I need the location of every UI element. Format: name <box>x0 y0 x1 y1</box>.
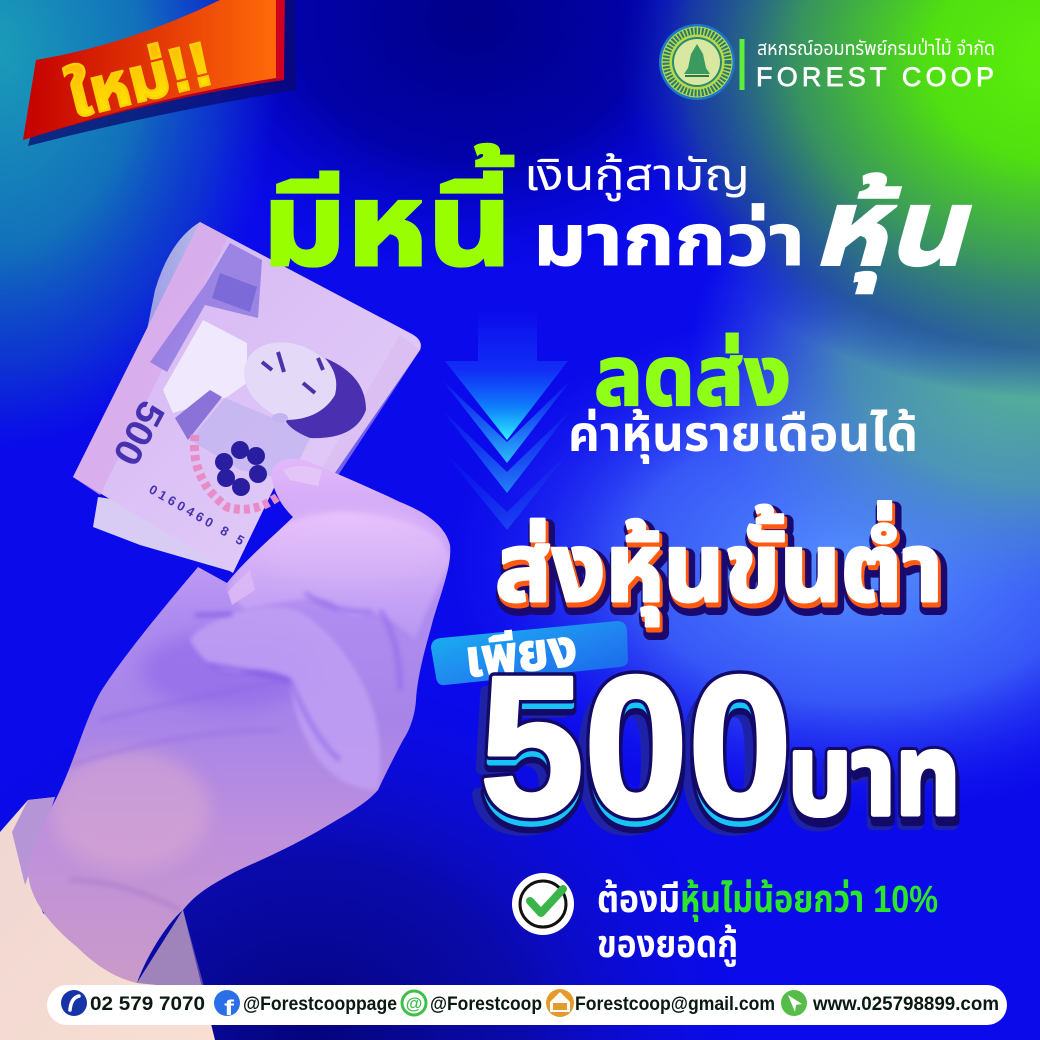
heading: debt more than shares: มีหนี้ <box>262 144 513 290</box>
badge: new ribbon <box>23 0 296 146</box>
icon: facebook <box>214 990 240 1020</box>
contact bar <box>47 985 1007 1025</box>
icon: check mark <box>512 873 574 935</box>
icon: downward arrows <box>442 310 571 530</box>
flower emblem <box>215 441 267 496</box>
amount: 500 baht <box>472 635 962 870</box>
unit baht: บาท <box>790 720 962 845</box>
number 500: 500 <box>480 643 792 864</box>
badge: only: เพียง <box>462 620 580 689</box>
banknote: 0160460 8 5 <box>146 482 250 550</box>
number 500: 500 <box>480 635 792 856</box>
contact bar: Forestcoop@gmail.com <box>575 994 775 1015</box>
contact bar: @Forestcooppage <box>243 994 397 1015</box>
text: minimum share payment: ส่งหุ้นขั้นต่ำ <box>499 508 947 633</box>
illustration: banknote held in hand <box>0 222 452 1040</box>
portrait <box>231 327 366 438</box>
icon: phone <box>61 990 87 1016</box>
icon: cooperative seal <box>659 24 735 100</box>
badge: new ribbon: ใหม่!! <box>61 29 219 132</box>
note: share requirement: ของยอดกู้ <box>597 924 738 967</box>
icon: line at: @ <box>406 994 422 1013</box>
number 500: 500 <box>472 649 784 870</box>
text: reduce monthly share payment: ลดส่ง <box>594 329 791 423</box>
text: minimum share payment: ส่งหุ้นขั้นต่ำ <box>497 505 945 630</box>
contact bar: 02 579 7070 <box>90 994 205 1015</box>
badge: only <box>431 620 628 689</box>
text: reduce monthly share payment <box>568 329 918 464</box>
banknote <box>73 222 421 573</box>
heading: debt more than shares <box>262 144 972 294</box>
unit baht: บาท <box>788 713 960 838</box>
heading: debt more than shares: หุ้น <box>812 167 972 294</box>
unit baht: บาท <box>786 723 960 848</box>
logo: Forest Coop: สหกรณ์ออมทรัพย์กรมป่าไม้ จำกัด <box>757 37 995 60</box>
hand <box>0 459 452 1040</box>
icon: facebook: f <box>224 997 235 1020</box>
unit baht: บาท <box>788 713 960 838</box>
text: reduce monthly share payment: ค่าหุ้นรายเดือนได้ <box>568 406 918 464</box>
heading: debt more than shares: มากกว่า <box>533 201 805 281</box>
note: share requirement: หุ้นไม่น้อยกว่า 10% <box>680 879 938 922</box>
logo: Forest Coop <box>659 24 995 100</box>
contact bar: www.025798899.com <box>812 994 999 1015</box>
finger: lower <box>190 607 380 790</box>
number 500: 500 <box>480 647 792 868</box>
finger: thumb <box>227 512 452 640</box>
logo: Forest Coop: FOREST COOP <box>756 62 994 92</box>
icon: website cursor <box>781 990 807 1016</box>
icon: email <box>546 989 574 1017</box>
note: share requirement <box>597 879 938 967</box>
note: share requirement: ต้องมี <box>597 879 680 921</box>
contact bar: @Forestcoop <box>430 994 542 1015</box>
text: minimum share payment: ส่งหุ้นขั้นต่ำ <box>495 501 943 626</box>
denomination 500: 500 <box>104 394 172 472</box>
icon: line at <box>402 991 426 1015</box>
number 500: 500 <box>480 635 792 856</box>
heading: debt more than shares: เงินกู้สามัญ <box>524 151 750 202</box>
